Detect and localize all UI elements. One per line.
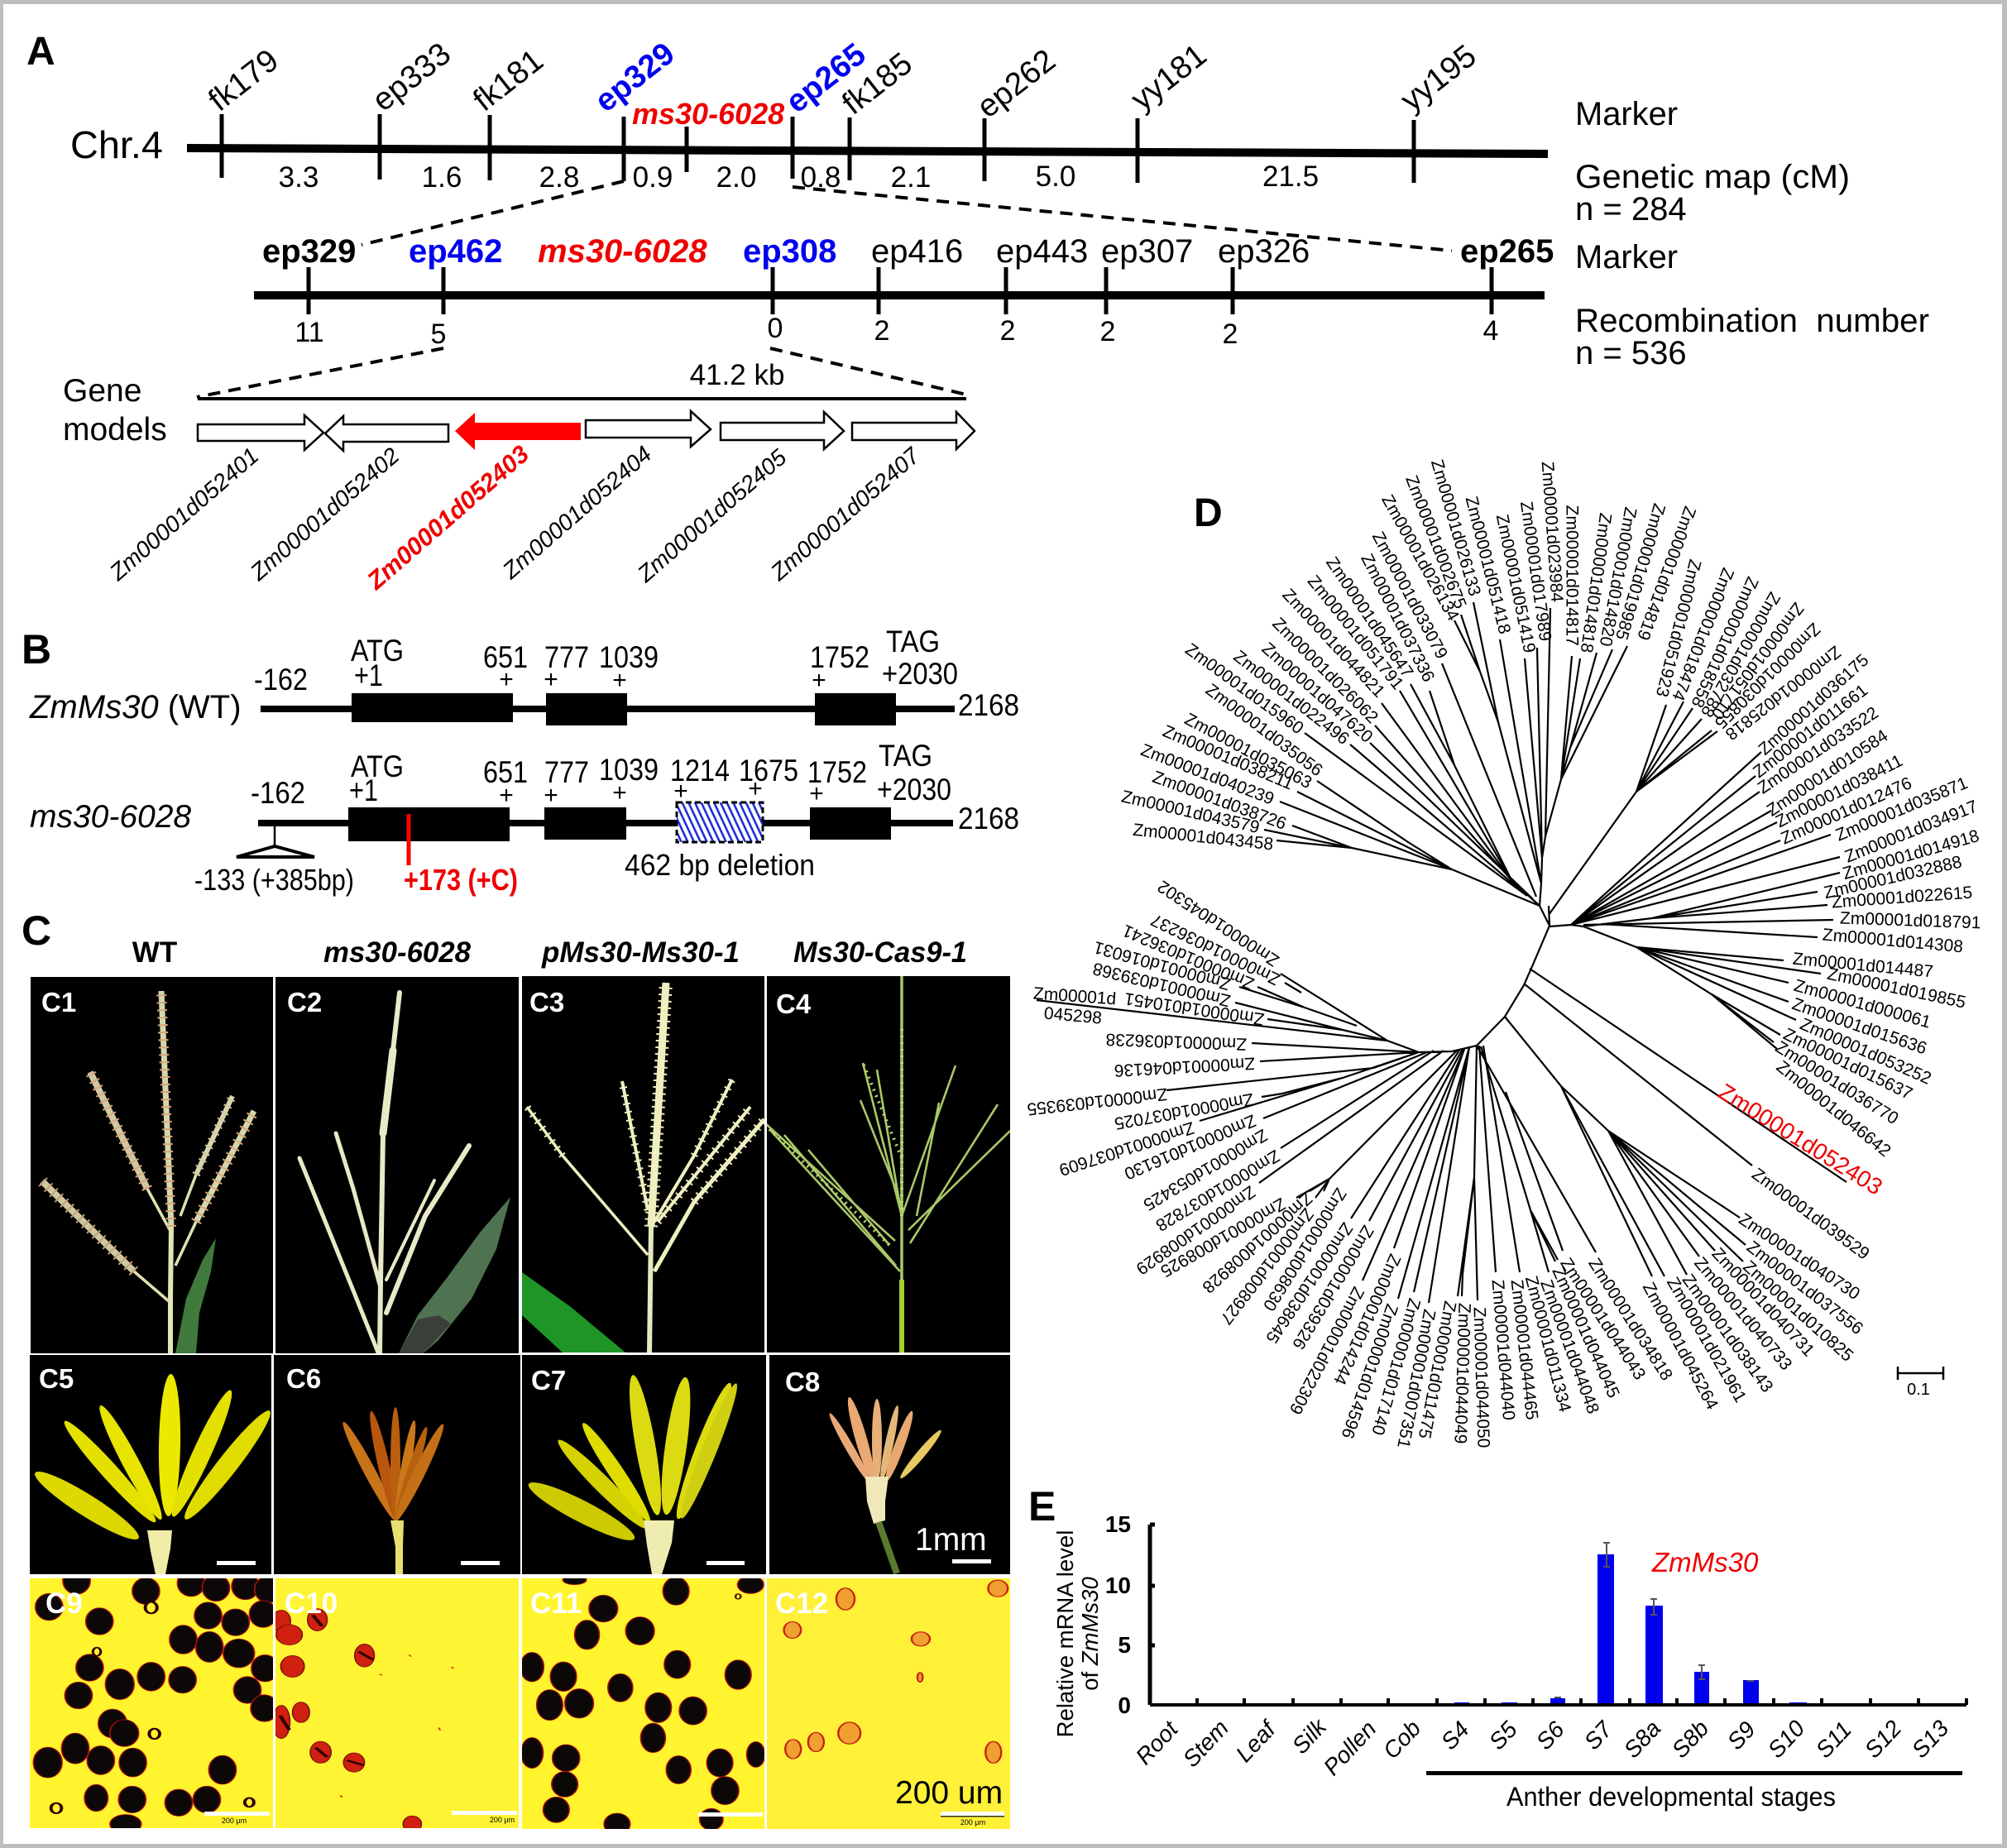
mutant gene model: -162 [251,776,305,810]
gene name: ZmMs30 [1651,1547,1759,1578]
genetic distances: 0.9 [633,161,673,194]
category labels: S11 [1811,1716,1856,1763]
tree labels, right side reading outward: Zm00001d008630 [1259,1185,1350,1314]
y axis and ticks: 0 [1118,1692,1131,1718]
tree labels, right side reading outward: Zm00001d011334 [1521,1274,1574,1415]
mutant gene model: + [612,779,627,807]
tree labels, upper left reading inward: Zm00001d051923 [1652,558,1704,699]
tree labels, right side reading outward: Zm00001d044049 [1450,1303,1473,1444]
photo C2: ms30-6028 tassel [275,977,519,1353]
category labels: S8a [1619,1716,1665,1763]
tree labels, right side reading outward: Zm00001d035871 [1833,773,1971,845]
tree labels, upper left reading inward: Zm00001d026134 [1377,491,1463,625]
tree labels, right side reading outward: Zm00001d019855 [1826,965,1967,1013]
mutant gene model: + [673,778,688,805]
marker names on chromosome: fk181 [467,42,550,118]
tree labels, right side reading outward: Zm00001d053425 [1140,1125,1271,1214]
recombination numbers [295,313,1498,350]
red point mutation [407,814,410,865]
tree labels, right side reading outward: Zm00001d008929 [1133,1182,1259,1278]
tree labels, right side reading outward: Zm00001d036241 [1120,921,1257,993]
tree labels, upper left reading inward: Zm00001d002675 [1401,473,1470,611]
tree labels, right side reading outward: Zm00001d010584 [1764,726,1891,821]
mutant gene model: 1214 [670,754,730,788]
row labels on right: Marker [1575,239,1678,275]
mutant gene model: 1039 [599,753,659,787]
tree labels, right side reading outward: Zm00001d044465 [1507,1279,1541,1421]
tree labels, right side reading outward: 045298 [1043,1004,1103,1028]
photo C3: complemented tassel: C3 [529,987,564,1017]
wild type gene model: 777 [544,640,589,674]
tree labels, right side reading outward: Zm00001d022615 [1831,883,1973,912]
genetic distances: 2.0 [716,161,756,194]
panel E: expression bar chart [1028,1483,1966,1812]
wild type gene model: ZmMs30 (WT) [29,689,242,725]
marker names on chromosome: ms30-6028 [632,97,784,131]
column headings: pMs30-Ms30-1 [541,936,740,969]
tree labels, right side reading outward: Zm00001d036770 [1772,1037,1902,1128]
200 um scale: 200 μm [960,1818,985,1826]
genetic distances [279,160,1319,194]
category labels: Leaf [1231,1715,1282,1767]
photo C5: WT anthers [30,1355,278,1574]
tree labels, right side reading outward: Zm00001d038645 [1262,1219,1357,1347]
fine map marker names [262,233,1554,270]
error bars [1554,1543,1754,1697]
tree labels, right side reading outward: Zm00001d014244 [1329,1251,1405,1388]
y axis and ticks [1105,1511,1155,1718]
category labels: Pollen [1319,1716,1381,1780]
tree labels, upper left reading inward: Zm00001d014818 [1577,512,1615,654]
tree labels, upper left reading inward: Zm00001d026062 [1268,614,1382,727]
category labels [1131,1712,1954,1780]
gene names: Zm00001d052401 [104,443,263,586]
photo C9: WT pollen [30,1568,282,1834]
tree labels, right side reading outward: Zm00001d044043 [1556,1255,1649,1383]
tree labels, right side reading outward: Zm00001d000061 [1792,976,1933,1032]
y axis and ticks: 10 [1105,1573,1131,1598]
mutation captions: 462 bp deletion [625,848,815,882]
tree labels, upper left reading inward: Zm00001d025818 [1722,642,1844,744]
gene names: Zm00001d052405 [632,444,792,587]
recombination numbers: 5 [431,318,446,350]
tree labels, right side reading outward: Zm00001d053252 [1797,1014,1934,1089]
tree labels, upper left reading inward: Zm00001d040239 [1138,740,1277,809]
mutant gene model: 1752 [807,755,867,789]
panel letter E: E [1028,1483,1056,1530]
fine map marker names: ep307 [1101,233,1193,270]
wild type gene model: 1039 [599,640,659,674]
marker names on chromosome: ep262 [970,42,1062,125]
category labels: Root [1131,1716,1184,1769]
mutant gene model: 777 [544,755,589,789]
wild type gene model: + [544,666,558,693]
photo C1: WT tassel: C1 [41,987,76,1017]
row labels on right [1575,96,1929,371]
tree labels, upper left reading inward: Zm00001d019985 [1612,501,1669,642]
tree labels, right side reading outward: Zm00001d015637 [1780,1025,1915,1104]
tree labels, upper left reading inward: Zm00001d015960 [1181,639,1307,738]
tree labels, right side reading outward: Zm00001d034818 [1584,1255,1676,1384]
fine map marker names: ep416 [871,233,963,270]
panel letter C: C [22,907,51,954]
tree labels, upper left reading inward: Zm00001d044821 [1278,585,1388,701]
fine map marker names: ep308 [743,233,836,270]
wild type gene model: ATG [351,634,404,668]
panel D: phylogenetic tree [1026,457,1981,1450]
y axis title: Relative mRNA level [1052,1530,1078,1737]
fine map marker names: ep462 [409,233,502,270]
fine map marker names: ep443 [996,233,1088,270]
deletion box [677,802,763,842]
tree labels, right side reading outward: Zm00001d021961 [1663,1274,1750,1405]
category labels: S8b [1667,1716,1713,1763]
y axis title [1052,1530,1103,1737]
tree labels, upper left reading inward: Zm00001d014820 [1596,505,1640,648]
tree labels, upper left reading inward: Zm00001d051419 [1492,513,1539,654]
gene names: Zm00001d052402 [245,443,405,586]
tree labels, right side reading outward: Zm00001d046642 [1773,1057,1894,1161]
row labels on right: Marker [1575,96,1678,132]
row labels on right: n = 284 [1575,191,1687,227]
tree labels, right side reading outward: Zm00001d012476 [1778,773,1914,849]
fine map marker names: ep326 [1218,233,1310,270]
marker names on chromosome: yy195 [1394,38,1483,118]
tree labels, upper left reading inward: Zm00001d038211 [1160,721,1296,794]
panel A: genetic map [26,30,1929,596]
tree labels, right side reading outward: Zm00001d008925 [1157,1194,1289,1281]
mutant gene model: 1675 [739,754,798,788]
tree labels, right side reading outward: Zm00001d037828 [1152,1146,1283,1235]
category labels: Silk [1287,1712,1333,1759]
recombination numbers: 2 [874,315,889,347]
mutant gene model: ATG [351,749,404,783]
row labels on right: Genetic map (cM) [1575,159,1850,195]
fine map marker names: ep265 [1460,233,1554,270]
tree labels, right side reading outward: Zm00001d032888 [1822,852,1964,902]
recombination numbers: 2 [1100,316,1115,347]
genetic distances: 2.8 [539,161,579,194]
photo C3: complemented tassel [522,976,764,1352]
photo C2: ms30-6028 tassel: C2 [287,987,322,1017]
tree labels, upper left reading inward: Zm00001d014819 [1633,504,1699,643]
category labels: Cob [1378,1715,1425,1764]
mutant gene model: +1 [349,773,378,807]
mutation captions: -133 (+385bp) [194,863,354,897]
tree labels, upper left reading inward: Zm00001d035063 [1181,710,1315,792]
wild type gene model: -162 [254,663,308,697]
tree labels, right side reading outward: Zm00001d036175 [1755,650,1872,759]
tree labels, right side reading outward: Zm00001d010451 [1123,989,1266,1028]
tree labels, upper left reading inward: Zm00001d051791 [1304,572,1407,693]
marker names on chromosome: fk185 [836,45,919,122]
tree labels, right side reading outward: Zm00001d008927 [1216,1204,1317,1328]
tree labels, upper left reading inward: Zm00001d018558 [1687,574,1762,711]
tree labels, upper left reading inward: Zm00001d018474 [1668,565,1737,704]
genetic distances: 0.8 [801,161,841,194]
tree labels, right side reading outward: Zm00001d [1032,984,1117,1008]
category labels: S10 [1763,1715,1810,1763]
tree labels, right side reading outward: Zm00001d016031 [1092,937,1233,993]
200 um scale: 200 um [895,1775,1003,1811]
fine map line with ticks [254,267,1545,314]
tree labels, upper left reading inward: Zm00001d051418 [1462,495,1514,636]
y axis and ticks: 15 [1105,1511,1131,1537]
column headings [132,936,967,969]
recombination numbers: 4 [1483,315,1498,347]
category labels: S13 [1907,1715,1954,1763]
category labels: Stem [1178,1715,1233,1772]
tree labels, upper left reading inward [1119,457,1844,854]
row labels on right: n = 536 [1575,335,1687,371]
tree labels, upper left reading inward: Zm00001d047620 [1258,639,1377,747]
bars [1454,1554,1807,1705]
marker names on chromosome: ep265 [779,36,873,120]
wild type gene model: 1752 [810,640,869,674]
marker names on chromosome: ep333 [366,36,457,118]
wild type gene model: 651 [483,640,528,674]
category labels: S7 [1579,1716,1618,1755]
genetic distances: 5.0 [1036,160,1075,193]
mutant gene model: 651 [483,755,528,789]
tree labels, upper left reading inward: Zm00001d030855 [1711,619,1824,732]
tree labels, upper left reading inward: Zm00001d023984 [1538,461,1566,603]
category labels: S9 [1722,1716,1760,1755]
anther stage bracket and caption [1426,1771,1962,1812]
panel letter B: B [22,626,51,673]
photo C11: complemented pollen [520,1575,765,1835]
tree labels, right side reading outward: Zm00001d008928 [1199,1188,1316,1297]
mutant gene model: + [748,775,763,802]
tree labels, right side reading outward: Zm00001d037556 [1743,1238,1866,1338]
tree labels, right side reading outward: Zm00001d044040 [1488,1279,1518,1421]
photo C7: complemented anthers [522,1355,766,1574]
mutant gene model: + [499,782,514,809]
tree labels, right side reading outward: Zm00001d040733 [1690,1254,1795,1374]
tree labels, right side reading outward: Zm00001d036238 [1105,1030,1247,1053]
photo C11: complemented pollen: C11 [530,1587,582,1620]
gene names: Zm00001d052407 [765,442,926,586]
mutant gene model: + [809,780,824,807]
panel B: gene structure [22,625,1019,897]
panel letter D: D [1194,491,1223,535]
wild type gene model [29,625,1019,725]
tree labels, right side reading outward: Zm00001d040731 [1708,1244,1818,1361]
tree labels, right side reading outward: Zm00001d017140 [1368,1296,1424,1437]
tree labels, right side reading outward: Zm00001d010825 [1739,1257,1856,1366]
tree labels, right side reading outward: Zm00001d044048 [1536,1277,1602,1416]
tree labels, right side reading outward: Zm00001d044050 [1470,1307,1493,1448]
wild type gene model: + [499,666,514,693]
marker names on chromosome [202,36,1483,131]
tree branches [1037,602,1847,1303]
marker names on chromosome: yy181 [1124,37,1214,117]
mutant gene model [30,739,1019,897]
tree labels, upper left reading inward: Zm00001d043458 [1132,821,1274,854]
insertion triangle [237,826,314,857]
photo C9: WT pollen: 200 μm [222,1817,247,1825]
fine map marker names: ms30-6028 [538,233,707,270]
tree labels, right side reading outward: Zm00001d045264 [1639,1280,1722,1413]
200 um scale [895,1775,1004,1826]
column headings: WT [132,936,177,969]
panel C: phenotype photos [22,907,1010,1835]
fine map marker names: ep329 [262,233,356,270]
gene names: Zm00001d052403 [362,440,534,596]
gene names: Zm00001d052404 [497,441,656,584]
tree labels, right side reading outward: Zm00001d040730 [1736,1209,1863,1304]
photo C10: mutant pollen [272,1578,519,1832]
row labels on right: Recombination number [1575,303,1929,339]
marker names on chromosome: ep329 [588,36,682,119]
category labels: S12 [1860,1715,1907,1763]
photo C9: WT pollen: C9 [46,1587,83,1620]
mutant gene model: ms30-6028 [30,799,191,835]
gene models label: Gene [63,373,141,409]
photo C4: Cas9 tassel: C4 [776,989,812,1019]
tree labels, right side reading outward: Zm00001d007351 [1393,1308,1439,1450]
tree labels, right side reading outward: Zm00001d014918 [1841,826,1981,883]
photo C12: Cas9 pollen: C12 [775,1587,828,1620]
category labels: S5 [1484,1716,1522,1755]
tree labels, right side reading outward: Zm00001d039355 [1026,1084,1168,1118]
tree labels, upper left reading inward: Zm00001d035056 [1202,680,1326,780]
tree labels, right side reading outward: Zm00001d018791 [1840,909,1981,932]
mutant gene model: 2168 [958,802,1019,835]
genetic distances: 21.5 [1262,160,1319,193]
tree labels, right side reading outward: Zm00001d039326 [1288,1222,1377,1352]
x axis and ticks [1150,1698,1966,1705]
chromosome 4 map line with ticks [187,114,1548,183]
tree labels, right side reading outward: Zm00001d033522 [1755,703,1882,798]
photo C8: Cas9 anthers [769,1355,1010,1574]
wild type gene model: 2168 [958,688,1019,722]
anther stage bracket and caption: Anther developmental stages [1506,1782,1836,1812]
recombination numbers: 0 [768,313,783,344]
tree labels, right side reading outward: Zm00001d037609 [1056,1118,1197,1180]
marker names on chromosome: fk179 [202,42,285,118]
tree labels, right side reading outward: Zm00001d014487 [1792,950,1934,981]
wild type gene model: +1 [354,658,383,692]
mutant gene model: TAG [879,739,932,773]
wild type gene model: + [812,667,826,694]
tree labels, upper left reading inward: Zm00001d032788 [1697,589,1784,721]
tree labels, right side reading outward [1026,650,1981,1450]
tree labels, upper left reading inward: Zm00001d038726 [1150,768,1289,834]
tree labels, right side reading outward: Zm00001d014596 [1338,1301,1401,1441]
category labels: S4 [1436,1716,1474,1755]
wild type gene model: +2030 [882,657,958,691]
mutation captions: +173 (+C) [404,863,518,897]
photo C6: mutant anthers: C6 [286,1363,321,1394]
mutant gene model: +2030 [877,773,951,807]
category labels: S6 [1531,1716,1569,1755]
tree scale bar [1898,1367,1943,1399]
tree labels, right side reading outward: Zm00001d015636 [1789,994,1929,1058]
mutant gene model: + [544,782,558,809]
mutation captions [194,848,815,897]
tree labels, right side reading outward: Zm00001d011475 [1415,1300,1459,1440]
tree labels, upper left reading inward: Zm00001d037336 [1357,551,1438,685]
tree labels, right side reading outward: Zm00001d016130 [1122,1110,1258,1183]
tree labels, upper left reading inward: Zm00001d014817 [1562,505,1582,646]
tree labels, upper left reading inward: Zm00001d051710 [1708,599,1808,723]
tree labels, right side reading outward: Zm00001d034917 [1842,797,1981,867]
photo C5: WT anthers: C5 [39,1363,74,1394]
recombination numbers: 2 [1223,318,1238,350]
genetic distances: 3.3 [279,161,319,194]
tree labels, upper left reading inward: Zm00001d017989 [1516,500,1554,643]
tree labels, upper left reading inward: Zm00001d045647 [1322,553,1417,681]
1 mm scale: 1mm [915,1522,987,1558]
tree labels, right side reading outward: Zm00001d022309 [1286,1284,1368,1417]
photo C8: Cas9 anthers: C8 [785,1367,820,1397]
gene models label [63,373,167,448]
genetic distances: 1.6 [422,161,462,194]
tree labels, right side reading outward: Zm00001d045302 [1154,877,1282,970]
photo C12: Cas9 pollen [767,1578,1010,1829]
scale line 41.2 kb: 41.2 kb [690,359,784,391]
gene arrows [198,411,975,451]
tree labels, right side reading outward: Zm00001d046136 [1114,1054,1256,1080]
gene models label: models [63,412,167,448]
tree labels, right side reading outward: Zm00001d039529 [1748,1165,1873,1264]
photo C7: complemented anthers: C7 [531,1365,566,1396]
tree labels, upper left reading inward: Zm00001d026133 [1427,457,1484,598]
photo C10: mutant pollen: C10 [285,1587,338,1620]
photo C10: mutant pollen: 200 μm [490,1816,515,1824]
photo C6: mutant anthers [274,1355,520,1574]
tree labels, upper left reading inward: Zm00001d022496 [1230,647,1353,749]
photo C4: Cas9 tassel [765,976,1010,1352]
gene names [104,440,926,596]
tree labels, right side reading outward: Zm00001d037025 [1113,1089,1255,1133]
zoom lines to gene models [197,348,966,397]
highlighted gene label: Zm00001d052403 [1714,1079,1887,1200]
tree labels, right side reading outward: Zm00001d044045 [1548,1264,1623,1400]
tree labels, right side reading outward: Zm00001d039368 [1091,959,1233,1010]
wild type gene model: TAG [886,625,940,658]
panel letter A: A [26,30,55,74]
zoom lines to fine map [362,181,1452,251]
tree labels, right side reading outward: Zm00001d038143 [1679,1271,1777,1396]
tree labels, right side reading outward: Zm00001d014308 [1822,926,1964,956]
y axis title: of ZmMs30 [1077,1577,1103,1691]
column headings: ms30-6028 [323,936,472,969]
wild type gene model: + [612,667,627,694]
photo C1: WT tassel [31,977,273,1353]
tree labels, upper left reading inward: Zm00001d043579 [1119,787,1262,837]
tree labels, right side reading outward: Zm00001d011661 [1750,681,1871,782]
recombination numbers: 11 [295,317,324,348]
recombination numbers: 2 [1000,315,1015,347]
column headings: Ms30-Cas9-1 [793,936,967,969]
y axis and ticks: 5 [1118,1632,1131,1658]
genetic distances: 2.1 [891,161,931,194]
tree labels, right side reading outward: Zm00001d038411 [1773,751,1906,831]
tree labels, right side reading outward: Zm00001d036237 [1148,910,1283,989]
tree labels, upper left reading inward: Zm00001d033079 [1368,529,1451,662]
chromosome 4 label: Chr.4 [70,123,163,166]
tree scale bar: 0.1 [1907,1381,1930,1399]
